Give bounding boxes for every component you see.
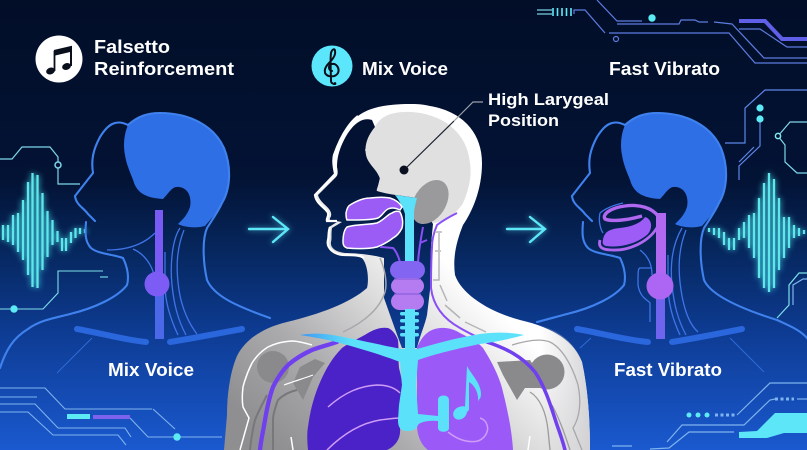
purple mouth lower (343, 211, 403, 249)
circuit lines: middle right (725, 90, 807, 318)
purple arteries (260, 342, 565, 450)
arrow right (507, 217, 545, 242)
blue outline (0, 113, 270, 368)
vocal column (656, 213, 666, 285)
callout: High Larygeal Position: High Larygeal (488, 90, 609, 109)
circuit lines: lower left of waveform (0, 271, 108, 313)
heading: Falsetto Reinforcement (94, 37, 234, 79)
face outline (315, 116, 364, 258)
shoulder line (57, 338, 92, 373)
vocal tract (600, 205, 658, 250)
neck grey dashes (343, 232, 486, 332)
callout: High Larygeal Position: Position (488, 111, 559, 130)
icon: treble clef (312, 46, 352, 86)
right lung (417, 328, 513, 450)
heading: Falsetto Reinforcement: Falsetto (94, 37, 170, 57)
leader line (400, 102, 483, 174)
circuit lines: top right (537, 0, 807, 63)
grey brain (365, 112, 471, 223)
arm contour lines (240, 340, 582, 450)
purple mouth upper (346, 197, 402, 220)
throat lines (107, 228, 197, 335)
body silhouette (224, 104, 590, 450)
collar bones (577, 329, 742, 342)
purple nerves (380, 213, 487, 342)
left figure: head and shoulders (0, 113, 270, 373)
icon: beamed music note (36, 36, 82, 82)
right figure: head and shoulders (537, 113, 807, 372)
waveform left (3, 173, 85, 288)
blue head fill (124, 113, 229, 227)
lung veins (327, 385, 488, 450)
cyan airway upper (395, 195, 417, 262)
label: Mix Voice: Mix Voice (108, 359, 194, 380)
heading: Mix Voice: Mix Voice (362, 58, 448, 79)
music note on lung (453, 366, 481, 420)
arrow left (249, 217, 288, 242)
blue head fill (621, 113, 726, 227)
grey jaw gland (404, 173, 456, 231)
shoulder lines (580, 338, 764, 372)
vocal column (155, 210, 163, 284)
collar bones (77, 329, 242, 342)
trachea (400, 309, 419, 351)
heading: Falsetto Reinforcement: Reinforcement (94, 59, 234, 79)
left lung (307, 328, 402, 450)
waveform right (709, 173, 804, 292)
label: Fast Vibrato: Fast Vibrato (614, 360, 722, 380)
larynx rings (390, 261, 425, 310)
blue outline (537, 113, 807, 338)
heading: Fast Vibrato: Fast Vibrato (609, 59, 720, 79)
face and neck cutout (318, 119, 433, 348)
callout: High Larygeal Position (488, 90, 609, 130)
cyan bronchi (300, 333, 524, 432)
circuit lines: upper left (0, 147, 80, 184)
central anatomical figure (224, 102, 590, 450)
circuit lines: bottom left (0, 388, 222, 445)
throat lines (599, 203, 698, 335)
right arm shading (540, 325, 590, 450)
shoulder joints (257, 351, 564, 400)
circuit lines: bottom right (612, 383, 807, 449)
